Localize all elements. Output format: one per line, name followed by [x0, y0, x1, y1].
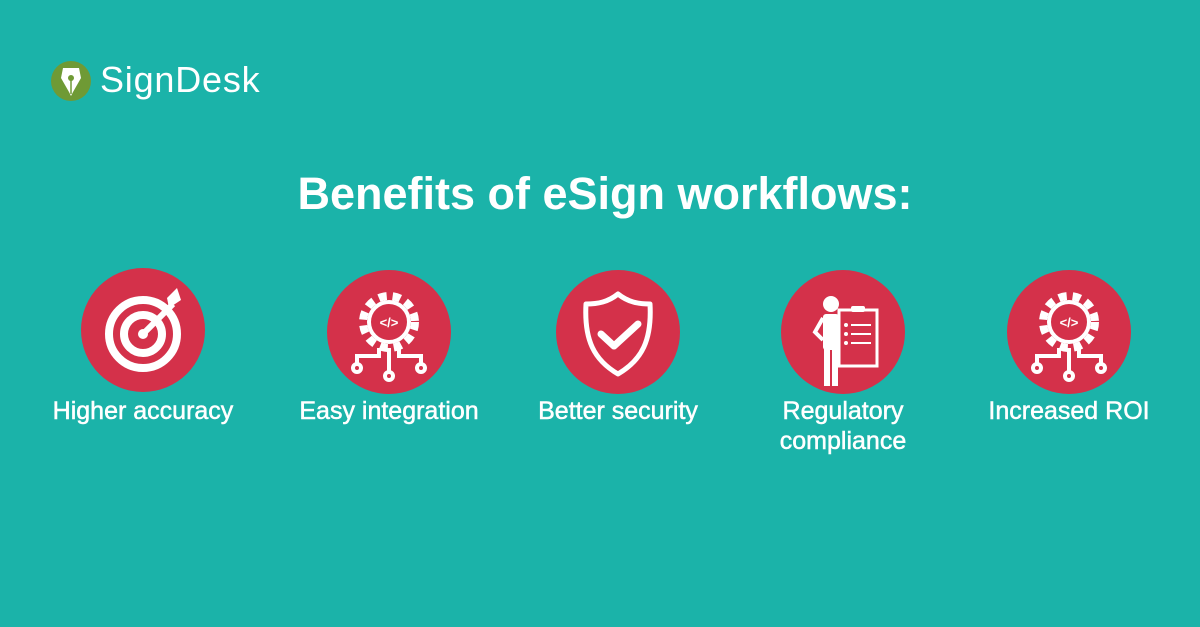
label: Easy integration [299, 397, 479, 425]
panel: higher accuracy [53, 268, 234, 425]
brand name: SignDesk [100, 59, 260, 100]
panel: increased ROI [988, 270, 1150, 425]
icon: gear network [1007, 270, 1131, 394]
panel: better security [538, 270, 698, 425]
panel: easy integration [299, 270, 479, 425]
icon: pen nib [51, 61, 91, 101]
icon: gear network [327, 270, 451, 394]
title: Benefits of eSign workflows: [297, 168, 913, 219]
label [780, 397, 906, 455]
panel: regulatory compliance [780, 270, 906, 455]
label: Regulatory [783, 397, 903, 425]
icon: shield check [556, 270, 680, 394]
icon: person with clipboard [781, 270, 905, 394]
icon: target [81, 268, 205, 392]
label: Better security [538, 397, 698, 425]
label: Higher accuracy [53, 397, 233, 425]
icon: gear network: </> [1060, 315, 1079, 330]
logo [51, 59, 260, 101]
label: Increased ROI [988, 397, 1150, 425]
icon: gear network: </> [380, 315, 399, 330]
label: compliance [780, 427, 906, 455]
